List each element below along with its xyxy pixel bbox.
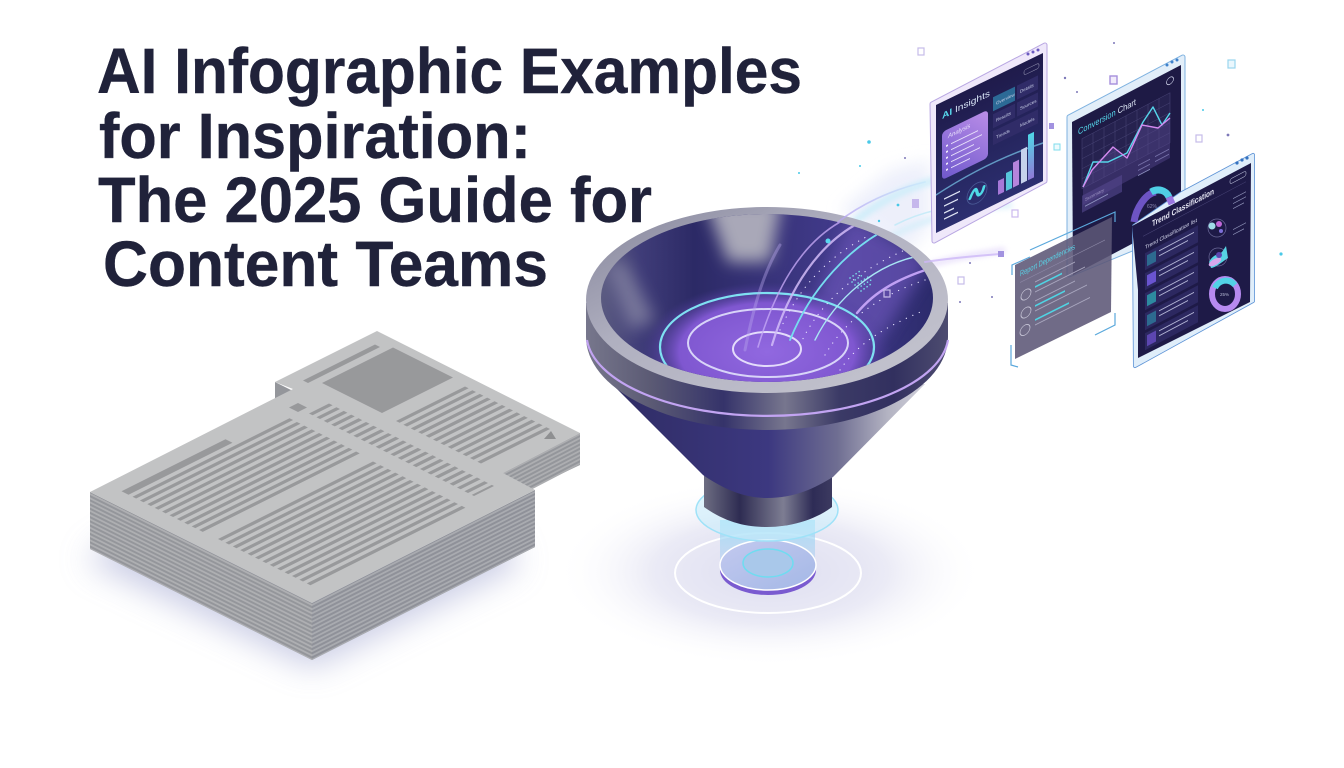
button labels: Overview xyxy=(996,92,1015,107)
button grid xyxy=(993,75,1038,145)
legend xyxy=(1138,149,1169,175)
short text column xyxy=(319,408,484,491)
tag xyxy=(1230,171,1246,184)
panel: conversion chart xyxy=(1069,57,1183,275)
panel title: Trend Classification xyxy=(1152,186,1214,228)
side notes xyxy=(1233,192,1246,235)
middle ring xyxy=(688,309,848,377)
image placeholder xyxy=(322,348,453,413)
glowing purple line xyxy=(587,340,948,416)
cone xyxy=(612,384,925,498)
window dots xyxy=(1166,58,1178,66)
paper stack xyxy=(85,331,592,668)
data arcs crossing the rim xyxy=(838,182,1000,262)
panel title: Report Dependencies xyxy=(1020,241,1075,278)
left highlight xyxy=(604,262,655,330)
bowl details xyxy=(606,214,928,382)
gauge xyxy=(1134,190,1172,222)
panel content xyxy=(1078,75,1174,215)
row icons xyxy=(1020,287,1031,338)
panel content xyxy=(1143,169,1246,351)
rim top xyxy=(586,207,948,393)
wave icon xyxy=(967,178,987,208)
left text column xyxy=(211,458,284,494)
panel: AI insights xyxy=(932,45,1045,241)
donut chart: 25% xyxy=(1220,292,1229,297)
stat box: Summary xyxy=(1085,187,1105,203)
back text column xyxy=(430,404,516,446)
dotted particle arcs xyxy=(780,235,925,370)
purple well xyxy=(649,286,884,382)
tag xyxy=(1024,63,1039,75)
stack shadow xyxy=(85,530,520,668)
haze xyxy=(840,160,930,255)
funnel xyxy=(586,182,1000,613)
panel frame xyxy=(932,45,1045,241)
purple series xyxy=(1083,118,1170,187)
sheet content xyxy=(102,342,592,587)
left heading bar xyxy=(122,439,232,495)
window dots xyxy=(1026,48,1040,56)
grey highlight xyxy=(705,200,782,262)
floor glow xyxy=(555,477,985,667)
stream through panel xyxy=(936,138,1043,195)
network icon xyxy=(1208,219,1226,237)
small square xyxy=(289,403,307,412)
gauge: 62% xyxy=(1147,204,1158,210)
dotted square patch xyxy=(850,271,871,291)
panel body xyxy=(1132,163,1251,358)
list heading: Trend Classification list xyxy=(1145,218,1197,251)
button labels: Sources xyxy=(1020,98,1037,112)
top sheets surface xyxy=(90,331,580,603)
neck xyxy=(704,470,832,527)
small list xyxy=(944,191,960,219)
button labels xyxy=(996,81,1037,141)
outer cyan ring xyxy=(658,292,876,366)
panel: report dependencies xyxy=(1011,212,1115,367)
cyan progress bars xyxy=(1035,270,1069,320)
base disc xyxy=(720,540,816,595)
front stack left side xyxy=(90,492,312,660)
title: AI Infographic Examples xyxy=(97,35,802,107)
button labels: Details xyxy=(1020,82,1034,95)
analysis card: Analysis xyxy=(947,122,971,141)
panel title: AI Insights xyxy=(942,88,990,122)
chart grid xyxy=(1082,93,1170,189)
list icons xyxy=(1147,250,1156,346)
cyan node xyxy=(826,238,830,244)
title: Content Teams xyxy=(103,228,548,300)
panel frame xyxy=(1134,155,1253,366)
purple data arcs xyxy=(745,222,940,350)
light beam xyxy=(720,520,815,570)
rim band xyxy=(586,303,948,430)
button labels: Trends xyxy=(996,128,1010,141)
settings icon xyxy=(1166,75,1174,86)
stream bands xyxy=(850,180,1012,275)
panel body xyxy=(1015,217,1112,359)
right text column xyxy=(296,500,390,548)
title: The 2025 Guide for xyxy=(98,164,652,236)
panel content xyxy=(1020,226,1105,338)
floating particles xyxy=(798,42,1283,303)
window dots xyxy=(1235,156,1249,165)
donut chart xyxy=(1212,279,1238,309)
flower icon xyxy=(1207,246,1228,268)
chart area fill xyxy=(1083,118,1170,205)
panel title: Conversion Chart xyxy=(1078,97,1136,138)
small triangle xyxy=(544,431,556,439)
inner ring xyxy=(733,332,801,366)
button labels: Results xyxy=(996,110,1012,124)
title xyxy=(97,35,802,300)
neck halo xyxy=(696,479,838,541)
bar chart xyxy=(998,132,1034,195)
corner brackets xyxy=(1011,212,1115,367)
front stack right side xyxy=(312,490,535,660)
bowl interior xyxy=(601,214,933,382)
button labels: Models xyxy=(1020,116,1035,129)
nebula glow xyxy=(814,224,928,342)
list text lines xyxy=(1159,232,1194,336)
panel body xyxy=(1072,65,1181,275)
cyan series xyxy=(1083,107,1170,187)
back sheets side xyxy=(275,382,580,490)
panel: trend classification xyxy=(1132,155,1253,366)
analysis card xyxy=(942,110,988,180)
panel content xyxy=(936,53,1043,233)
base ring xyxy=(675,533,861,613)
light streams outside the funnel xyxy=(840,160,1012,275)
list rows xyxy=(1145,225,1198,350)
title: for Inspiration: xyxy=(99,100,531,172)
back heading bar xyxy=(303,344,380,383)
panel frame xyxy=(1069,57,1183,275)
row lines xyxy=(1035,254,1090,325)
